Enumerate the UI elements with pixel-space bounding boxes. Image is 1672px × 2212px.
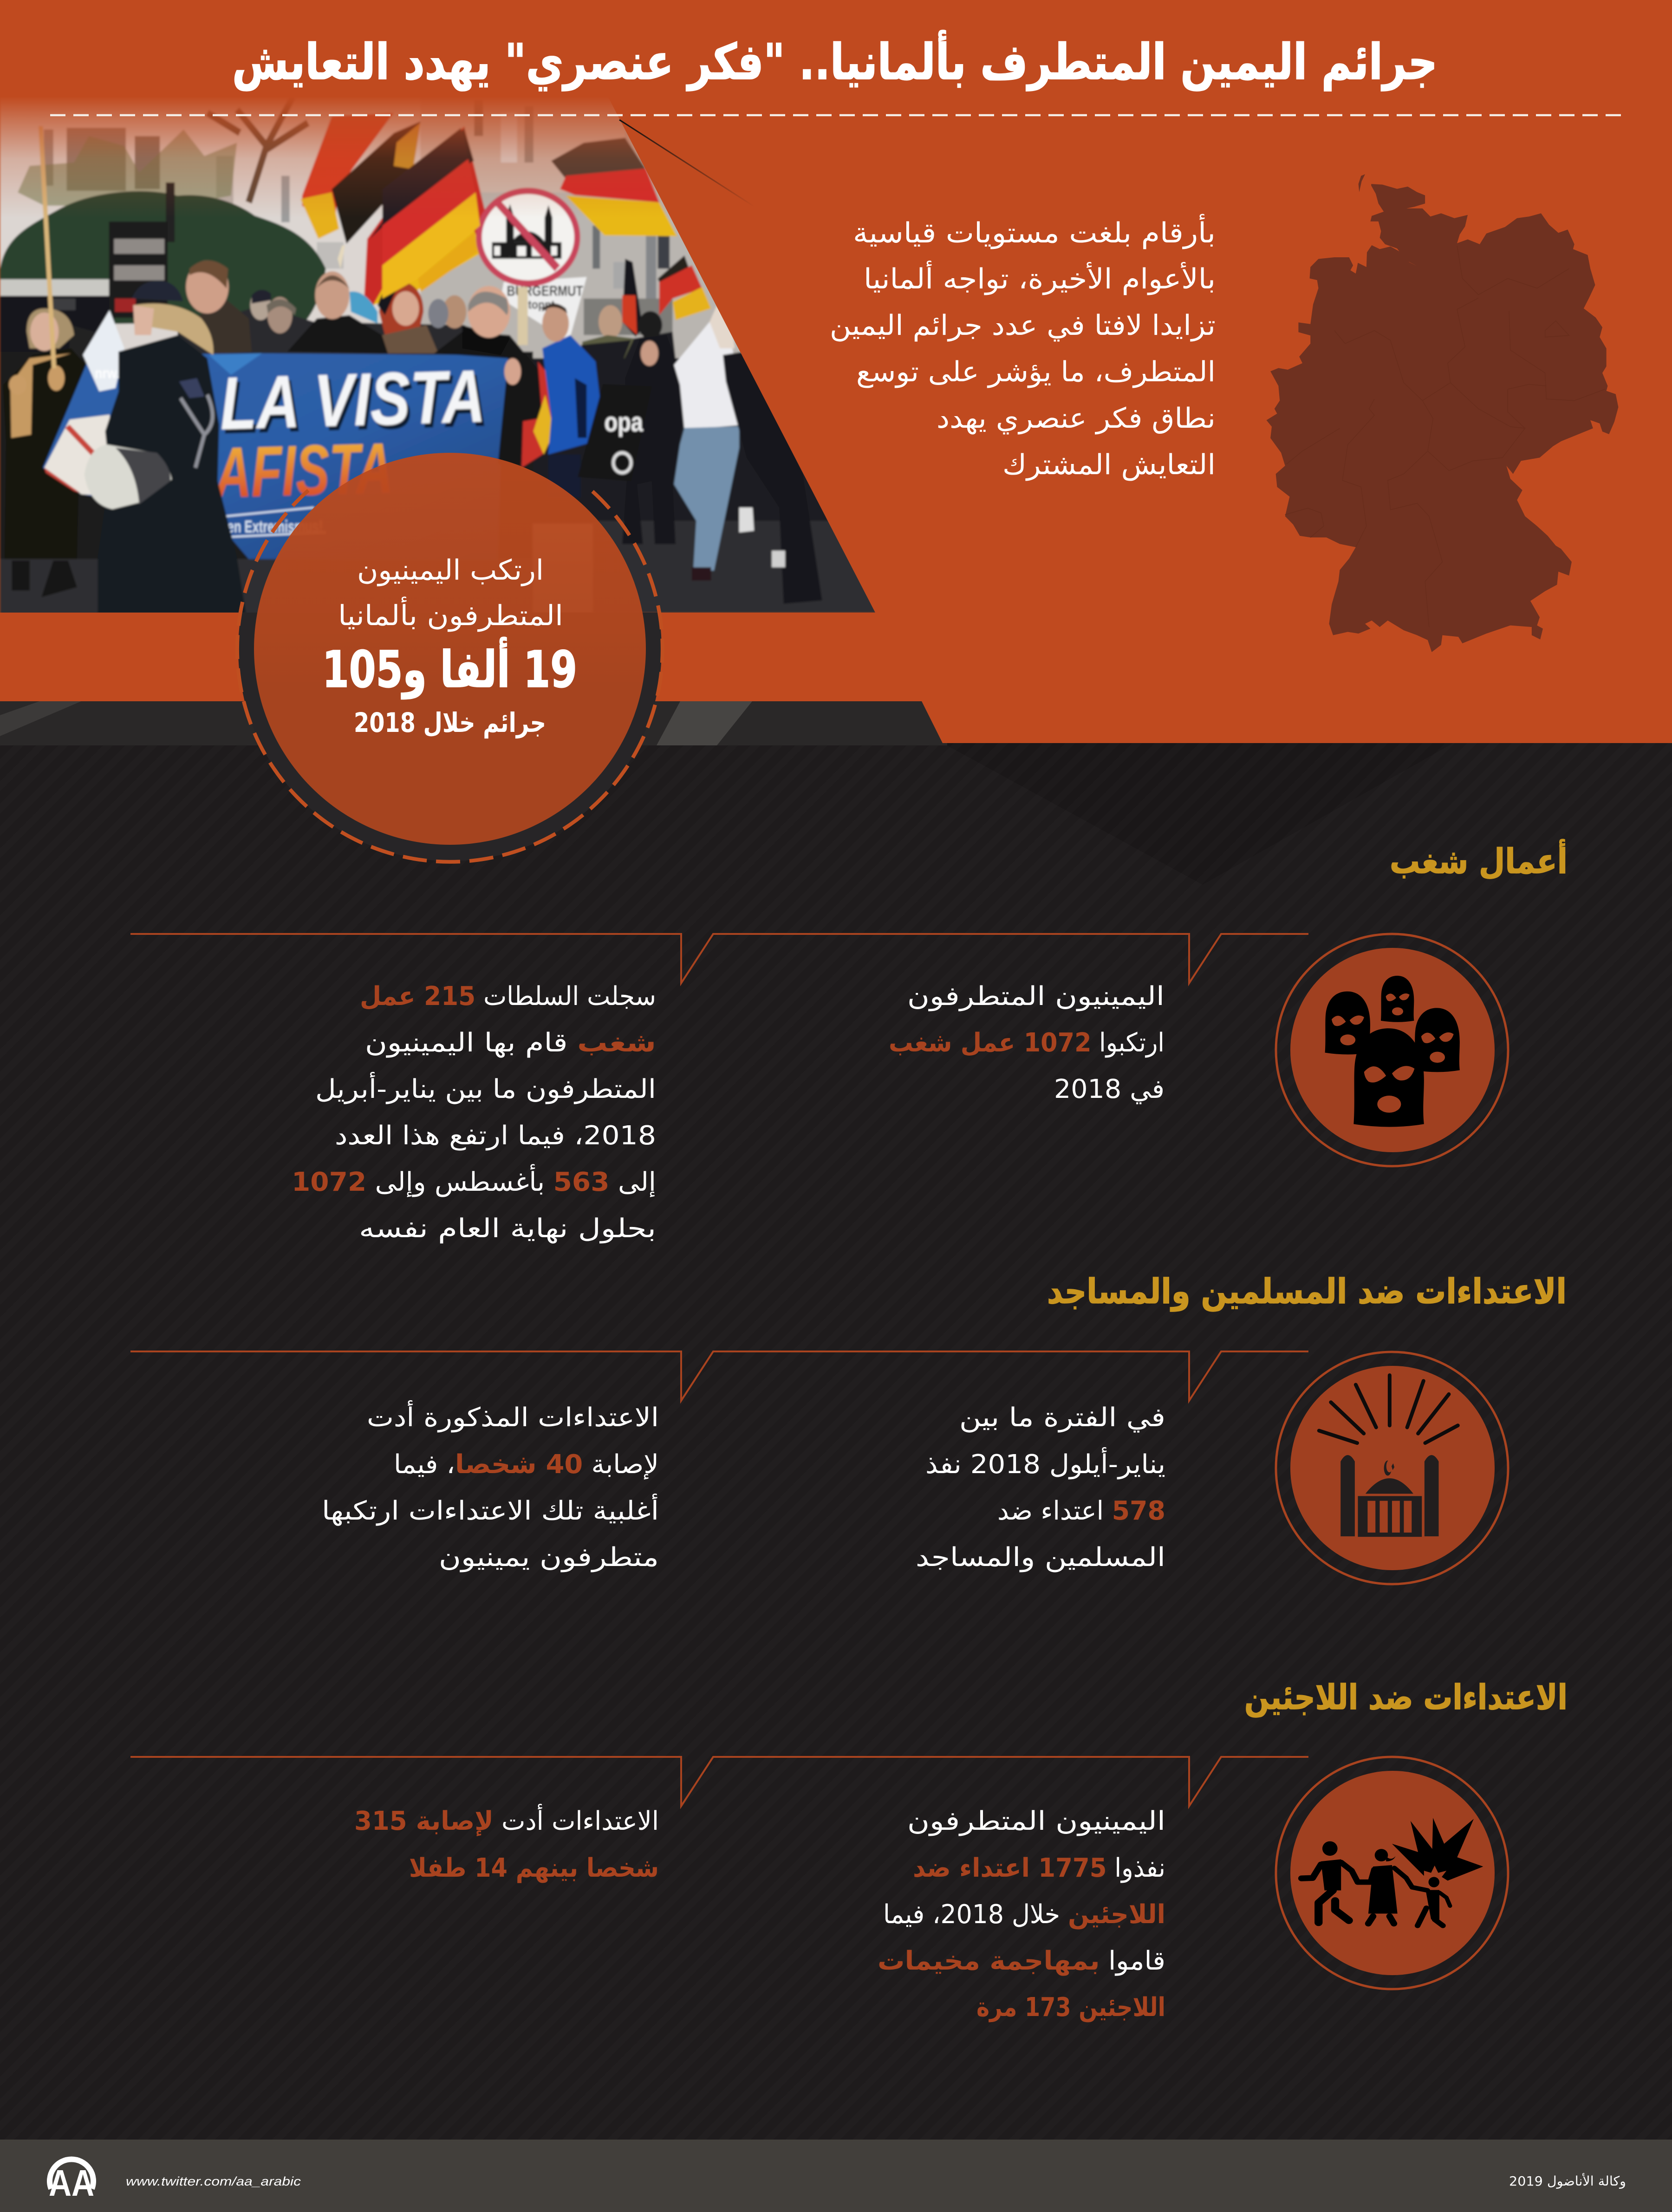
section 3 left text: الاعتداءات أدت لإصابة 315	[354, 1804, 659, 1836]
dark lower fill	[0, 352, 533, 564]
section 3 right text: نفذوا 1775 اعتداء ضد	[913, 1853, 1165, 1883]
panel: orange header	[0, 0, 1672, 743]
anti-mosque sign	[518, 287, 528, 345]
stat text	[322, 554, 577, 739]
map of Germany	[1267, 174, 1618, 652]
poster	[109, 222, 168, 318]
flag right	[551, 137, 646, 179]
hooded woman	[622, 335, 682, 544]
section 2 left text: متطرفون يمينيون	[439, 1542, 659, 1573]
LA VISTA text: AFISTA	[213, 428, 393, 513]
panel: grey band under the header	[0, 699, 947, 745]
man with glasses	[189, 299, 252, 355]
footer bar	[0, 2140, 1672, 2212]
white hoodie man	[674, 322, 747, 430]
dark figure right	[723, 352, 822, 604]
section 1 left text: سجلت السلطات 215 عمل	[360, 981, 656, 1011]
icon: fleeing family and explosion	[1276, 1757, 1508, 1989]
photo: demonstration with flags and banner	[0, 88, 921, 615]
section 3 left text	[354, 1804, 659, 1883]
road right	[592, 521, 921, 613]
white sign	[501, 277, 587, 342]
photo top fade	[0, 86, 671, 218]
helmet	[85, 444, 172, 509]
section 3 right text: اللاجئين 173 مرة	[976, 1992, 1165, 2023]
red yellow flag piece	[521, 362, 554, 468]
photo: demonstration with flags and banner: nrw.n	[95, 365, 127, 382]
section 1 right text: في 2018	[1054, 1074, 1165, 1104]
title: جرائم اليمين المتطرف بألمانيا.. "فكر عنصري" يهدد التعايش	[232, 30, 1438, 91]
flags left	[302, 113, 394, 229]
small flags	[622, 259, 643, 337]
section 3 connector line	[130, 1757, 1308, 1806]
dashed divider	[50, 114, 1621, 116]
man centre	[287, 315, 394, 353]
banner	[43, 353, 508, 561]
section 1 left text: المتطرفون ما بين يناير-أبريل	[315, 1072, 656, 1104]
intro text block: نطاق فكر عنصري يهدد	[937, 402, 1216, 435]
dark textured background	[0, 697, 1672, 2141]
section 1 right text: اليمينيون المتطرفون	[907, 981, 1165, 1011]
darker chevron under header	[943, 743, 1453, 885]
left flag	[382, 128, 468, 226]
intro text block: التعايش المشترك	[1002, 449, 1216, 481]
thin line on orange	[619, 120, 755, 207]
section 3 right text: اللاجئين خلال 2018، فيما	[883, 1899, 1165, 1930]
photo: demonstration with flags and banner: BURGERMUT	[507, 283, 583, 300]
section 3 right text: قاموا بمهاجمة مخيمات	[878, 1946, 1165, 1976]
bush	[0, 191, 326, 325]
photo: demonstration with flags and banner: then Extremismus!	[216, 517, 323, 536]
section 1 connector line	[130, 934, 1308, 983]
section 2 right text: 578 اعتداء ضد	[997, 1496, 1165, 1526]
section 3 heading: الاعتداءات ضد اللاجئين	[1244, 1677, 1568, 1717]
intro text block: بالأعوام الأخيرة، تواجه ألمانيا	[864, 261, 1216, 295]
car	[0, 296, 110, 354]
road	[0, 559, 533, 615]
section 2 left text: الاعتداءات المذكورة أدت	[367, 1400, 659, 1433]
centre crowd	[599, 305, 622, 339]
stat text: المتطرفون بألمانيا	[338, 596, 563, 632]
intro text block: بأرقام بلغت مستويات قياسية	[853, 214, 1216, 249]
section 3 left text: شخصا بينهم 14 طفلا	[409, 1853, 659, 1883]
icon: masked men	[1276, 934, 1508, 1166]
stat text: 19 ألفا و105	[322, 637, 577, 699]
section 1 left text: بحلول نهاية العام نفسه	[359, 1214, 656, 1244]
section 2 left text	[322, 1400, 659, 1573]
dark crowd mass	[531, 357, 828, 523]
section 3 right text: اليمينيون المتطرفون	[907, 1806, 1165, 1836]
section 1 right text: ارتكبوا 1072 عمل شغب	[889, 1028, 1165, 1058]
woman with scarf	[50, 299, 76, 310]
section 2 heading: الاعتداءات ضد المسلمين والمساجد	[1047, 1272, 1567, 1312]
section 2 right text: المسلمين والمساجد	[916, 1542, 1165, 1573]
section 2 connector line	[130, 1351, 1308, 1401]
black banner	[578, 384, 652, 481]
footer link: www.twitter.com/aa_arabic	[126, 2174, 301, 2188]
photo: demonstration with flags and banner: opa	[605, 408, 643, 437]
section 1 left text: 2018، فيما ارتفع هذا العدد	[335, 1121, 656, 1151]
section 2 left text: أغلبية تلك الاعتداءات ارتكبها	[322, 1494, 659, 1526]
stat text: ارتكب اليمينيون	[357, 554, 544, 587]
section 3 right text	[878, 1806, 1165, 2023]
section 2 left text: لإصابة 40 شخصا، فيما	[394, 1449, 659, 1480]
logo: AA: AA	[49, 2162, 94, 2204]
section 1 left text: إلى 563 بأغسطس وإلى 1072	[292, 1164, 656, 1198]
panel: big stat circle	[237, 453, 663, 862]
red hair woman	[379, 282, 423, 339]
section 1 left text	[292, 981, 656, 1244]
section 2 right text: في الفترة ما بين	[959, 1403, 1165, 1433]
LA VISTA text: LA VISTA	[222, 359, 489, 450]
dark ring around the big circle	[238, 437, 662, 861]
photo: demonstration with flags and banner: toppt	[528, 298, 555, 312]
section 2 right text	[916, 1403, 1165, 1573]
stat text: جرائم خلال 2018	[354, 707, 546, 739]
crowd back	[178, 305, 503, 368]
intro text block: المتطرف، ما يؤشر على توسع	[856, 356, 1216, 388]
section 1 right text	[889, 981, 1165, 1104]
intro text block: تزايدا لافتا في عدد جرائم اليمين	[830, 309, 1216, 342]
footer credit: وكالة الأناضول 2019	[1509, 2173, 1626, 2189]
policewoman	[98, 335, 246, 613]
centre man	[434, 332, 548, 464]
blue jacket man	[542, 335, 605, 455]
section 1 left text: شغب قام بها اليمينيون	[365, 1028, 656, 1058]
section 2 right text: يناير-أيلول 2018 نفذ	[925, 1447, 1165, 1480]
LA VISTA text	[211, 354, 491, 513]
icon: attacked mosque	[1276, 1352, 1508, 1584]
LA VISTA text: LA VISTA	[219, 354, 486, 445]
intro text block	[830, 214, 1216, 481]
section 1 heading: أعمال شغب	[1390, 839, 1568, 881]
